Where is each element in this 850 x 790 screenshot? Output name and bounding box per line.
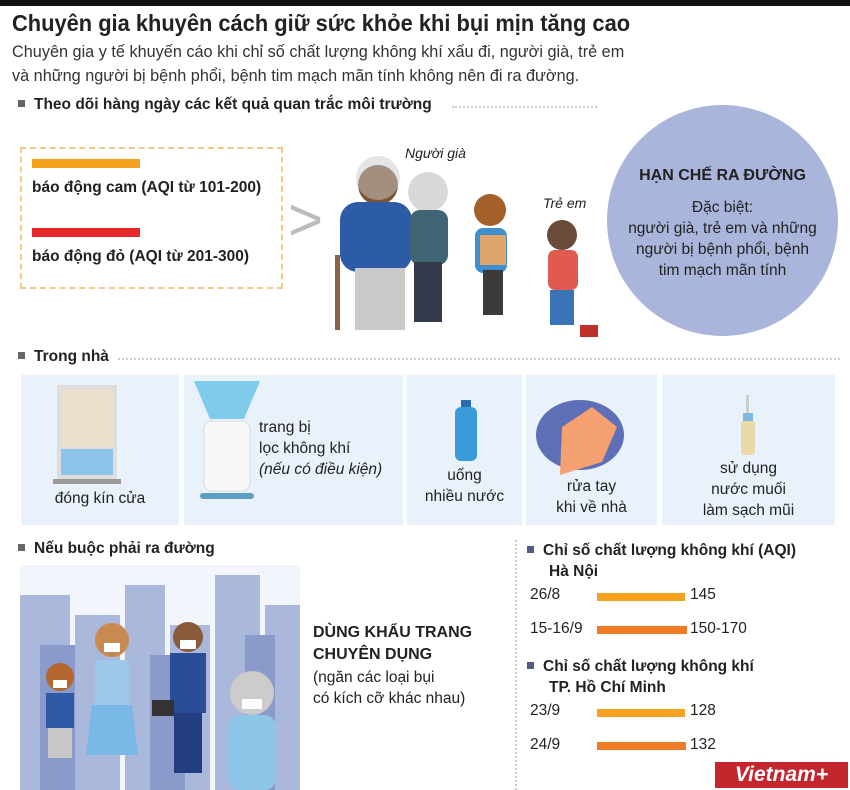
chart: AQI: 24/9 (530, 736, 560, 753)
logo: Vietnam+ (735, 763, 828, 786)
red alert: báo động đỏ (AQI từ 201-300) (32, 248, 249, 265)
panel: air purifier (184, 375, 403, 525)
subtitle (12, 43, 624, 85)
panel: drink water: uống (447, 467, 482, 484)
orange alert (32, 159, 261, 196)
panel: air purifier: (nếu có điều kiện) (259, 461, 382, 478)
top bar (0, 0, 850, 6)
legend box (20, 147, 283, 289)
heading: indoor: Trong nhà (34, 348, 109, 365)
panel: air purifier: lọc không khí (259, 440, 350, 457)
heading: monitoring: Theo dõi hàng ngày các kết quả quan trắc môi trường (34, 96, 432, 113)
Hanoi heading: Hà Nội (549, 563, 598, 580)
HCMC heading: TP. Hồ Chí Minh (549, 679, 666, 696)
chart: AQI: 132 (690, 736, 716, 753)
illustration: city with masks (20, 565, 300, 790)
circle callout (607, 105, 838, 336)
callout text: Đặc biệt: (692, 199, 753, 216)
panel: close windows (21, 375, 179, 525)
panel: drink water (407, 375, 522, 525)
subtitle: và những người bị bệnh phổi, bệnh tim mạch mãn tính không nên đi ra đường. (12, 67, 579, 85)
callout text: tim mạch mãn tính (659, 262, 786, 279)
callout text (628, 199, 817, 279)
illustration: elderly and children (335, 145, 598, 337)
callout text: người già, trẻ em và những (628, 220, 817, 237)
heading: outdoor: Nếu buộc phải ra đường (34, 540, 215, 557)
panel: wash hands: khi về nhà (556, 499, 627, 516)
Hanoi heading: Chỉ số chất lượng không khí (AQI) (543, 542, 796, 559)
panel: wash hands (526, 375, 657, 525)
panel: saline (662, 375, 835, 525)
arrow: > (288, 186, 323, 253)
logo (715, 762, 848, 788)
Hanoi heading (527, 542, 796, 580)
subtitle: Chuyên gia y tế khuyến cáo khi chỉ số chất lượng không khí xấu đi, người già, trẻ em (12, 43, 624, 61)
panel: wash hands: rửa tay (567, 478, 616, 495)
panel: drink water: nhiều nước (425, 488, 504, 505)
chart: AQI: 23/9 (530, 702, 560, 719)
mask text: CHUYÊN DỤNG (313, 646, 432, 663)
chart: AQI: 15-16/9 (530, 620, 583, 637)
illustration: elderly and children: Người già (405, 145, 466, 161)
panel: saline: làm sạch mũi (703, 502, 794, 519)
panel: saline: nước muối (711, 481, 786, 498)
HCMC heading (527, 658, 754, 696)
illustration: elderly and children: Trẻ em (543, 195, 587, 211)
chart: AQI: 26/8 (530, 586, 560, 603)
red alert (32, 228, 249, 265)
chart: AQI: 150-170 (690, 620, 747, 637)
orange alert: báo động cam (AQI từ 101-200) (32, 179, 261, 196)
chart: AQI: 145 (690, 586, 716, 603)
panel: air purifier: trang bị (259, 419, 311, 436)
chart: AQI: 128 (690, 702, 716, 719)
panel: saline: sử dụng (720, 460, 777, 477)
chart: AQI (527, 542, 796, 753)
callout text: người bị bệnh phổi, bệnh (636, 241, 809, 258)
mask text: (ngăn các loại bụi (313, 669, 434, 686)
panel: close windows: đóng kín cửa (55, 490, 145, 507)
mask text: DÙNG KHẨU TRANG (313, 624, 472, 641)
callout heading: HẠN CHẾ RA ĐƯỜNG (639, 167, 806, 184)
mask text: có kích cỡ khác nhau) (313, 690, 465, 707)
HCMC heading: Chỉ số chất lượng không khí (543, 658, 754, 675)
mask text (313, 622, 472, 707)
title: Chuyên gia khuyên cách giữ sức khỏe khi bụi mịn tăng cao (12, 10, 630, 36)
